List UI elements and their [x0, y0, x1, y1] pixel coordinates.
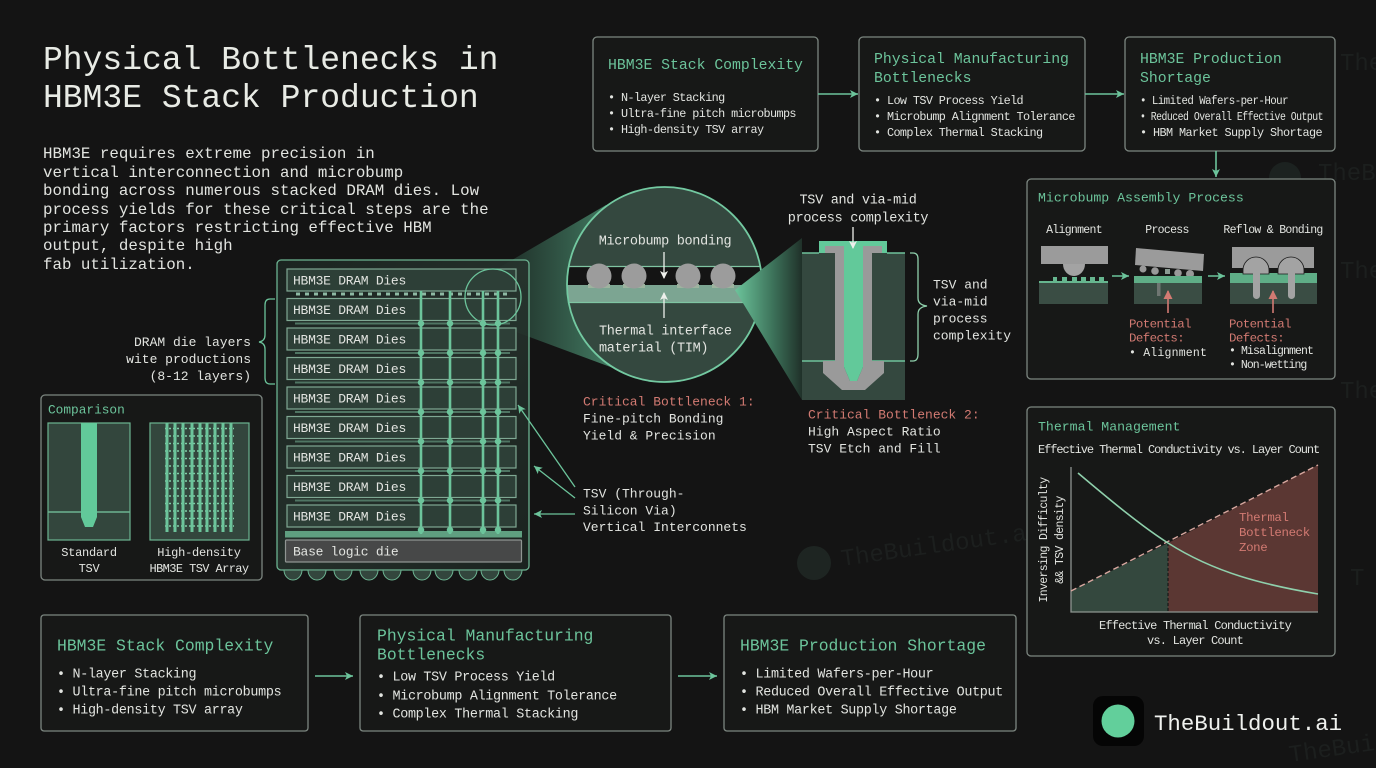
label: thermal interface material: Thermal interface: [599, 324, 732, 340]
arrow: defect 2: [1272, 291, 1274, 313]
callout: reflow defects: Defects:: [1229, 332, 1284, 346]
zoom cone: stack to microbump: [500, 205, 640, 378]
arrow: alignment to process: [1112, 275, 1129, 277]
panel: top production shortage: • Limited Wafers-per-Hour: [1140, 94, 1288, 108]
panel: microbump assembly process: [1027, 179, 1335, 379]
chart subtitle: Effective Thermal Conductivity vs. Layer Count: [1038, 443, 1319, 457]
watermarks: TheBuildout.ai: [839, 519, 1043, 574]
zoom cone: microbump to TSV: [735, 238, 802, 400]
panel: bottom manufacturing bottlenecks: • Complex Thermal Stacking: [377, 708, 578, 722]
label: TSV and via-mid top: [788, 194, 928, 226]
panel: top stack complexity: • N-layer Stacking: [608, 91, 725, 105]
callout: critical bottleneck 2: Critical Bottleneck 2:: [808, 408, 980, 422]
die stack: HBM3E DRAM Dies: [293, 303, 406, 318]
arrow: defect 1: [1167, 291, 1169, 313]
arrow: shortage to microbump panel: [1215, 151, 1217, 177]
bumps under stack: [284, 570, 522, 580]
label: TSV vertical interconnects: [583, 486, 747, 535]
die stack: HBM3E DRAM Dies: [293, 392, 406, 406]
arrow: TSV top: [852, 227, 854, 248]
annotation: DRAM die layers: [126, 299, 275, 384]
x axis label: vs. Layer Count: [1147, 634, 1243, 648]
die stack: HBM3E DRAM Dies: [293, 362, 406, 377]
panel: comparison: [41, 395, 262, 580]
callout: process defects: Potential: [1129, 318, 1191, 332]
panel: bottom manufacturing bottlenecks: • Low TSV Process Yield: [377, 670, 555, 686]
panel: bottom stack complexity: [41, 615, 308, 731]
step: reflow and bonding: Reflow & Bonding: [1223, 224, 1323, 237]
die stack: HBM3E DRAM Dies: [293, 480, 406, 495]
panel: thermal management: [1027, 407, 1335, 656]
panel: top manufacturing bottlenecks: Bottlenecks: [874, 71, 971, 87]
callout: critical bottleneck 2: High Aspect Ratio: [808, 424, 941, 440]
callout circle: microbump bonding: [560, 187, 770, 382]
panel: top stack complexity: • Ultra-fine pitch microbumps: [608, 107, 796, 121]
intro text block: fab utilization.: [43, 256, 195, 274]
label: TSV and via-mid right: process: [933, 312, 988, 326]
callout: critical bottleneck 1: [583, 394, 755, 444]
label: standard TSV: [61, 546, 117, 576]
panel: bottom stack complexity: • High-density TSV array: [57, 704, 243, 718]
label: high-density array: HBM3E TSV Array: [149, 562, 249, 576]
callout: reflow defects: • Misalignment: [1229, 345, 1313, 358]
panel: bottom manufacturing bottlenecks: [360, 615, 671, 731]
panel: bottom production shortage: • Reduced Overall Effective Output: [740, 686, 1003, 700]
step: reflow and bonding: [1223, 224, 1323, 304]
label: standard TSV: Standard: [61, 546, 117, 560]
green interposer band: [285, 531, 522, 538]
panel: bottom production shortage: • HBM Market Supply Shortage: [740, 704, 957, 718]
label: TSV vertical interconnects: Vertical Interconnets: [583, 520, 747, 535]
zoom ring: [465, 269, 521, 325]
intro text block: output, despite high: [43, 237, 233, 255]
arrow: top 1 to 2: [818, 93, 858, 95]
panel: top production shortage: • Reduced Overall Effective Output: [1140, 110, 1323, 124]
logo: TheBuildout.ai: [1154, 711, 1342, 737]
x axis label: [1099, 619, 1292, 648]
callout: critical bottleneck 1: Critical Bottleneck 1:: [583, 394, 755, 410]
TSV vertical interconnects: [421, 291, 498, 534]
y axis label: Inversing Difficulty: [1038, 477, 1051, 603]
intro text block: vertical interconnection and microbump: [43, 164, 403, 182]
panel: top stack complexity: [593, 37, 818, 151]
base logic die: [286, 540, 522, 562]
title: HBM3E Stack Production: [43, 80, 479, 117]
arrow: thermal interface: [663, 293, 665, 318]
panel: bottom stack complexity: • N-layer Stacking: [57, 668, 196, 682]
chart: conductivity vs layer count: [1071, 465, 1318, 612]
label: standard TSV: TSV: [79, 562, 100, 576]
die stack: HBM3E DRAM Dies: [293, 421, 406, 436]
watermarks: [797, 51, 1376, 768]
label: TSV and via-mid right: TSV and: [933, 278, 988, 292]
panel: top production shortage: • HBM Market Supply Shortage: [1140, 126, 1323, 140]
panel: bottom stack complexity: • Ultra-fine pitch microbumps: [57, 686, 281, 700]
step: alignment: Alignment: [1046, 224, 1102, 237]
label: microbump bonding: Microbump bonding: [599, 234, 731, 250]
panel: top manufacturing bottlenecks: Physical Manufacturing: [874, 52, 1069, 68]
callout: process defects: [1129, 318, 1207, 360]
arrow: bottom 1 to 2: [315, 675, 353, 677]
panel: bottom stack complexity: HBM3E Stack Complexity: [57, 636, 274, 656]
die stack: [287, 269, 516, 527]
label: TSV vertical interconnects: Silicon Via): [583, 504, 677, 518]
panel: bottom manufacturing bottlenecks: Physical Manufacturing: [377, 626, 593, 646]
panel: top manufacturing bottlenecks: • Low TSV Process Yield: [874, 94, 1024, 108]
label: TSV and via-mid top: TSV and via-mid: [799, 194, 917, 208]
intro text block: primary factors restricting effective HBM: [43, 219, 432, 237]
TSV cross-section diagram: [802, 241, 905, 400]
callout: reflow defects: [1229, 318, 1313, 372]
callout: process defects: • Alignment: [1129, 347, 1207, 360]
x axis label: Effective Thermal Conductivity: [1099, 619, 1292, 633]
logo: [1093, 696, 1342, 746]
callout: critical bottleneck 2: [808, 408, 980, 456]
panel: top stack complexity: • High-density TSV array: [608, 123, 764, 137]
annotation: DRAM die layers: DRAM die layers: [134, 335, 251, 350]
die stack: HBM3E DRAM Dies: [293, 332, 406, 348]
callout: critical bottleneck 1: Yield & Precision: [583, 428, 716, 444]
icon: standard TSV: [48, 423, 130, 540]
label: TSV vertical interconnects: TSV (Through-: [583, 486, 684, 502]
label: TSV and via-mid right: [933, 278, 1011, 344]
panel: HBM stack: [277, 260, 529, 580]
icon: high-density TSV array: [150, 423, 249, 540]
title: Physical Bottlenecks in: [43, 42, 498, 79]
y axis label: [1038, 477, 1067, 603]
panel: bottom manufacturing bottlenecks: • Microbump Alignment Tolerance: [377, 690, 617, 704]
label: high-density array: High-density: [157, 546, 241, 560]
heading: microbump: Microbump Assembly Process: [1038, 190, 1244, 206]
intro text block: [43, 145, 489, 274]
panel: bottom production shortage: HBM3E Production Shortage: [740, 636, 986, 656]
panel: top production shortage: Shortage: [1140, 71, 1211, 87]
y axis label: && TSV density: [1054, 496, 1067, 584]
base logic die: Base logic die: [293, 544, 398, 560]
label: TSV and via-mid top: process complexity: [788, 212, 928, 226]
intro text block: HBM3E requires extreme precision in: [43, 145, 375, 163]
annotation: DRAM die layers: wite productions: [126, 352, 251, 367]
panel: top production shortage: [1125, 37, 1335, 151]
intro text block: bonding across numerous stacked DRAM dies. Low: [43, 182, 480, 200]
heading: thermal: Thermal Management: [1038, 420, 1180, 434]
annotation: DRAM die layers: (8-12 layers): [150, 369, 251, 384]
arrow: bottom 2 to 3: [678, 675, 717, 677]
label: thermal interface material: material (TIM): [599, 342, 708, 356]
watermarks: T: [1350, 566, 1364, 593]
panel: bottom production shortage: [724, 615, 1016, 731]
chart: conductivity vs layer count: Bottleneck: [1239, 526, 1310, 540]
arrow: microbump bonding: [663, 252, 665, 278]
panel: top manufacturing bottlenecks: • Microbump Alignment Tolerance: [874, 110, 1075, 124]
callout: reflow defects: Potential: [1229, 318, 1291, 332]
panel: top stack complexity: HBM3E Stack Complexity: [608, 58, 803, 74]
step: alignment: [1039, 224, 1108, 304]
label: TSV and via-mid right: via-mid: [933, 294, 988, 310]
die stack: HBM3E DRAM Dies: [293, 274, 406, 288]
arrow: top 2 to 3: [1085, 93, 1124, 95]
label: high-density array: [149, 546, 249, 576]
die stack: HBM3E DRAM Dies: [293, 510, 406, 524]
callout: process defects: Defects:: [1129, 332, 1184, 346]
callout: reflow defects: • Non-wetting: [1229, 359, 1306, 372]
arrow: process to reflow: [1208, 275, 1225, 277]
intro text block: process yields for these critical steps are the: [43, 201, 489, 219]
callout: critical bottleneck 2: TSV Etch and Fill: [808, 442, 941, 456]
label: thermal interface material: [599, 324, 732, 356]
step: process: Process: [1145, 224, 1189, 237]
chart: conductivity vs layer count: Thermal: [1239, 511, 1289, 525]
heading: comparison: Comparison: [48, 402, 125, 418]
brace: TSV depth: [910, 253, 927, 361]
panel: top manufacturing bottlenecks: • Complex Thermal Stacking: [874, 126, 1043, 140]
label: TSV and via-mid right: complexity: [933, 328, 1011, 344]
panel: bottom manufacturing bottlenecks: Bottlenecks: [377, 646, 485, 664]
title: [43, 42, 498, 117]
arrows: TSV pointers: [518, 405, 575, 514]
panel: top manufacturing bottlenecks: [859, 37, 1085, 151]
chart: conductivity vs layer count: Zone: [1239, 541, 1267, 555]
callout: critical bottleneck 1: Fine-pitch Bonding: [583, 412, 723, 426]
step: process: [1134, 224, 1204, 304]
die stack: HBM3E DRAM Dies: [293, 450, 406, 466]
panel: top production shortage: HBM3E Production: [1140, 52, 1282, 68]
panel: bottom production shortage: • Limited Wafers-per-Hour: [740, 668, 933, 682]
